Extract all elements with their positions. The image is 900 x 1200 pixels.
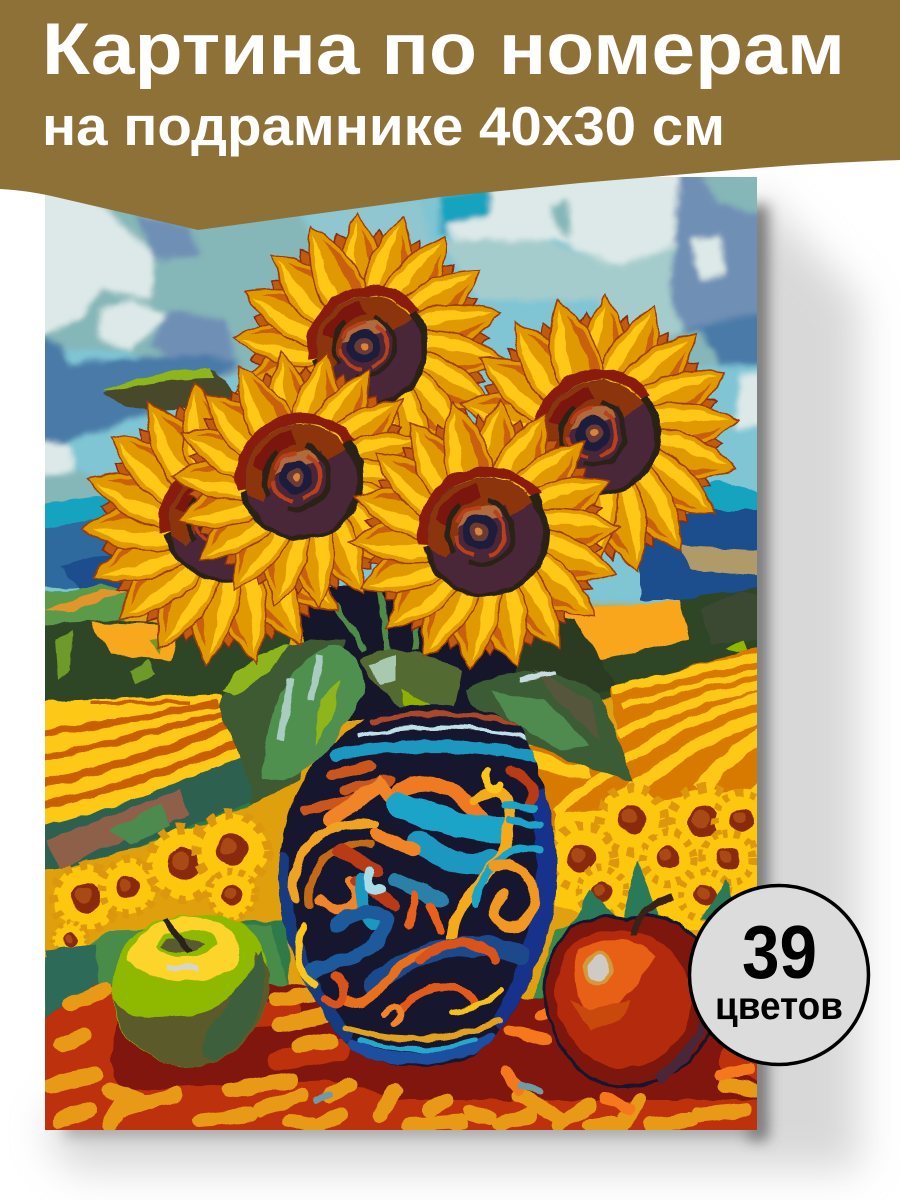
small sunflowers field: left	[30, 750, 322, 1030]
canvas shadow	[45, 190, 860, 1170]
badge caption: цветов	[715, 985, 843, 1028]
banner	[0, 0, 900, 230]
sunflower: top	[232, 212, 506, 436]
table	[30, 985, 770, 1140]
sunflowers	[61, 201, 751, 687]
small sunflowers field: right	[530, 785, 770, 1010]
title: Картина по номерам	[42, 9, 845, 90]
mountains	[30, 480, 770, 600]
sunflower: centre left	[170, 350, 411, 610]
sunflower: left back	[80, 382, 340, 667]
sky	[30, 165, 770, 605]
green apple	[112, 915, 269, 1066]
land under left field	[30, 740, 285, 870]
subtitle: на подрамнике 40х30 см	[42, 95, 725, 157]
field: left	[45, 694, 240, 824]
sunflower stems and leaves	[104, 368, 632, 805]
painting: sunflowers in a vase	[30, 165, 770, 1140]
colour count badge	[690, 886, 868, 1064]
field: right	[525, 645, 770, 830]
vase	[278, 705, 557, 1067]
sunflower: front	[346, 399, 622, 670]
red apple	[545, 896, 715, 1086]
sunflower: right	[459, 292, 740, 573]
distant hills and forest	[30, 585, 770, 710]
number of colours: 39	[742, 910, 817, 994]
